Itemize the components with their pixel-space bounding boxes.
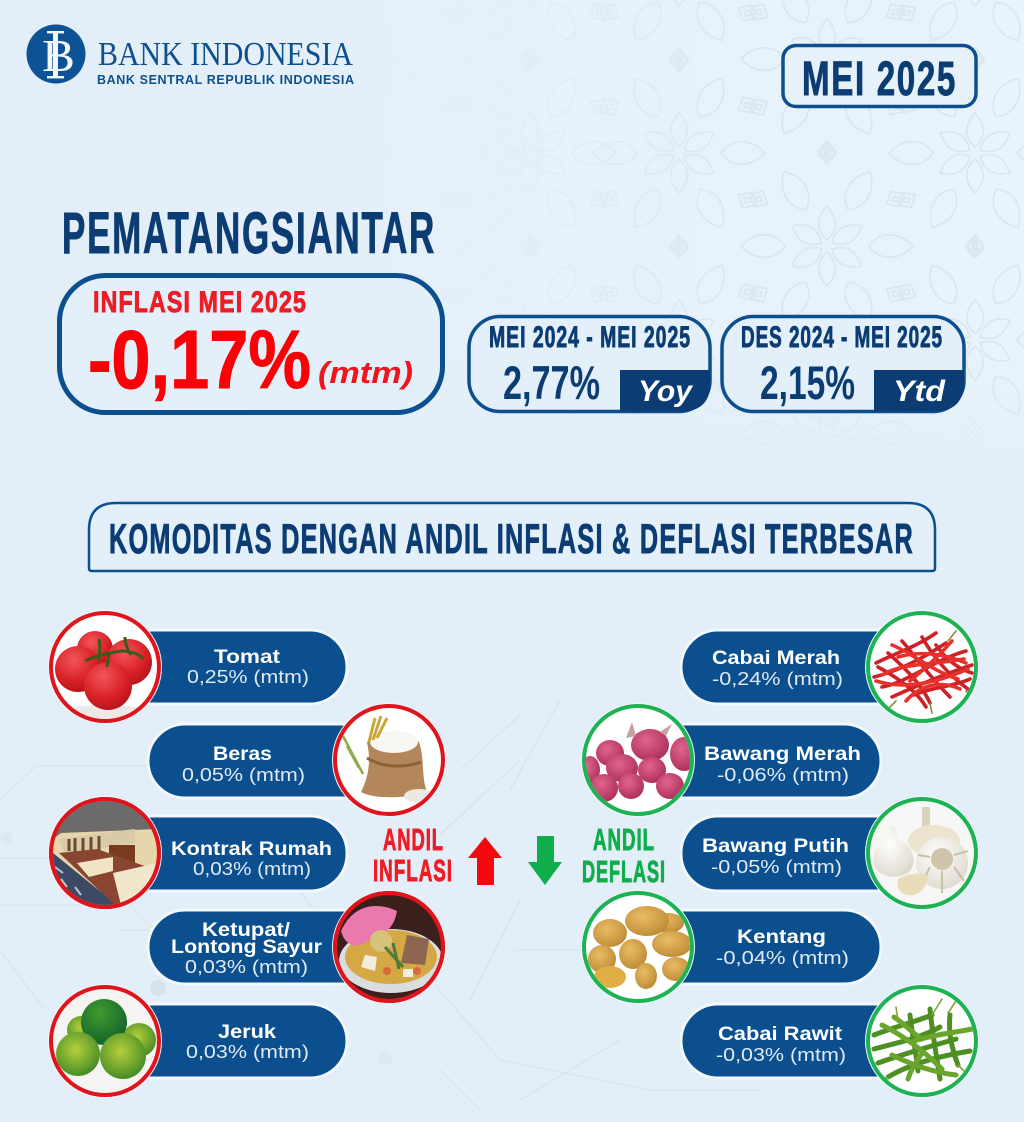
- ytd tab: [874, 370, 964, 412]
- item: Bawang Merah: [580, 703, 881, 817]
- red chili picture: [865, 610, 979, 724]
- panel: year on year: [469, 316, 710, 412]
- value: 0,05% (mtm): [182, 765, 305, 785]
- label second line: Lontong Sayur: [171, 937, 323, 958]
- label: Kontrak Rumah: [171, 839, 332, 860]
- title: city: PEMATANGSIANTAR: [62, 201, 436, 266]
- item: Bawang Putih: [681, 796, 979, 910]
- yoy period: MEI 2024 - MEI 2025: [489, 321, 691, 354]
- potato picture: [581, 890, 695, 1004]
- item: Tomat: [48, 610, 347, 724]
- item: Cabai Rawit: [681, 984, 979, 1098]
- value: -0,06% (mtm): [717, 765, 849, 785]
- logo: Bank Indonesia: [26, 24, 354, 87]
- legend: andil deflasi: [582, 822, 666, 889]
- value: 0,03% (mtm): [193, 859, 311, 879]
- label: Beras: [213, 744, 272, 765]
- logo emblem: B: [42, 30, 75, 81]
- item: Cabai Merah: [681, 610, 979, 724]
- value: -0,04% (mtm): [716, 948, 849, 968]
- rice sack picture: [332, 703, 446, 817]
- inflation unit: (mtm): [318, 355, 413, 390]
- item: Ketupat / Lontong Sayur: [148, 890, 446, 1004]
- item: Beras: [148, 703, 446, 817]
- garlic picture: [865, 796, 979, 910]
- logo wordmark: BANK INDONESIA: [98, 36, 353, 73]
- inflation label: INFLASI MEI 2025: [93, 286, 307, 319]
- ytd value: 2,15%: [760, 356, 855, 409]
- legend second line: INFLASI: [373, 853, 453, 888]
- value: -0,05% (mtm): [711, 857, 842, 877]
- label: Kentang: [737, 927, 826, 948]
- panel: year to date: [722, 316, 964, 412]
- orange picture: [48, 984, 162, 1098]
- section heading: [89, 503, 935, 571]
- ytd label: Ytd: [893, 375, 946, 408]
- value: 0,25% (mtm): [187, 667, 309, 687]
- lontong picture: [332, 890, 446, 1004]
- value: -0,03% (mtm): [716, 1045, 846, 1065]
- date badge: [783, 46, 976, 106]
- label: Bawang Putih: [702, 836, 849, 857]
- label: Tomat: [214, 647, 281, 668]
- label: Jeruk: [218, 1022, 276, 1043]
- arrow: up: [468, 837, 502, 885]
- tomato picture: [48, 610, 162, 724]
- yoy value: 2,77%: [503, 356, 600, 409]
- legend second line: DEFLASI: [582, 854, 666, 889]
- shallot picture: [580, 703, 698, 817]
- label: Cabai Merah: [712, 648, 840, 669]
- inflation value: -0,17%: [88, 313, 311, 406]
- yoy label: Yoy: [638, 375, 693, 408]
- yoy tab: [620, 370, 710, 412]
- value: 0,03% (mtm): [186, 1042, 309, 1062]
- legend: andil inflasi: ANDIL: [383, 822, 444, 857]
- rental house picture: [48, 796, 162, 910]
- legend: andil inflasi: [373, 822, 453, 888]
- value: -0,24% (mtm): [712, 669, 843, 689]
- label: Bawang Merah: [704, 744, 861, 765]
- item: Jeruk: [48, 984, 347, 1098]
- label: Ketupat/: [202, 920, 291, 941]
- value: 0,03% (mtm): [185, 957, 308, 977]
- panel: monthly inflation: [60, 276, 442, 412]
- logo tagline: BANK SENTRAL REPUBLIK INDONESIA: [97, 73, 354, 87]
- logo emblem: [26, 24, 86, 84]
- green chili picture: [865, 984, 979, 1098]
- item: Kontrak Rumah: [48, 796, 347, 910]
- date badge: MEI 2025: [802, 53, 957, 106]
- item: Kentang: [581, 890, 881, 1004]
- arrow: down: [528, 836, 562, 885]
- legend: andil deflasi: ANDIL: [593, 822, 655, 857]
- label: Cabai Rawit: [718, 1024, 843, 1045]
